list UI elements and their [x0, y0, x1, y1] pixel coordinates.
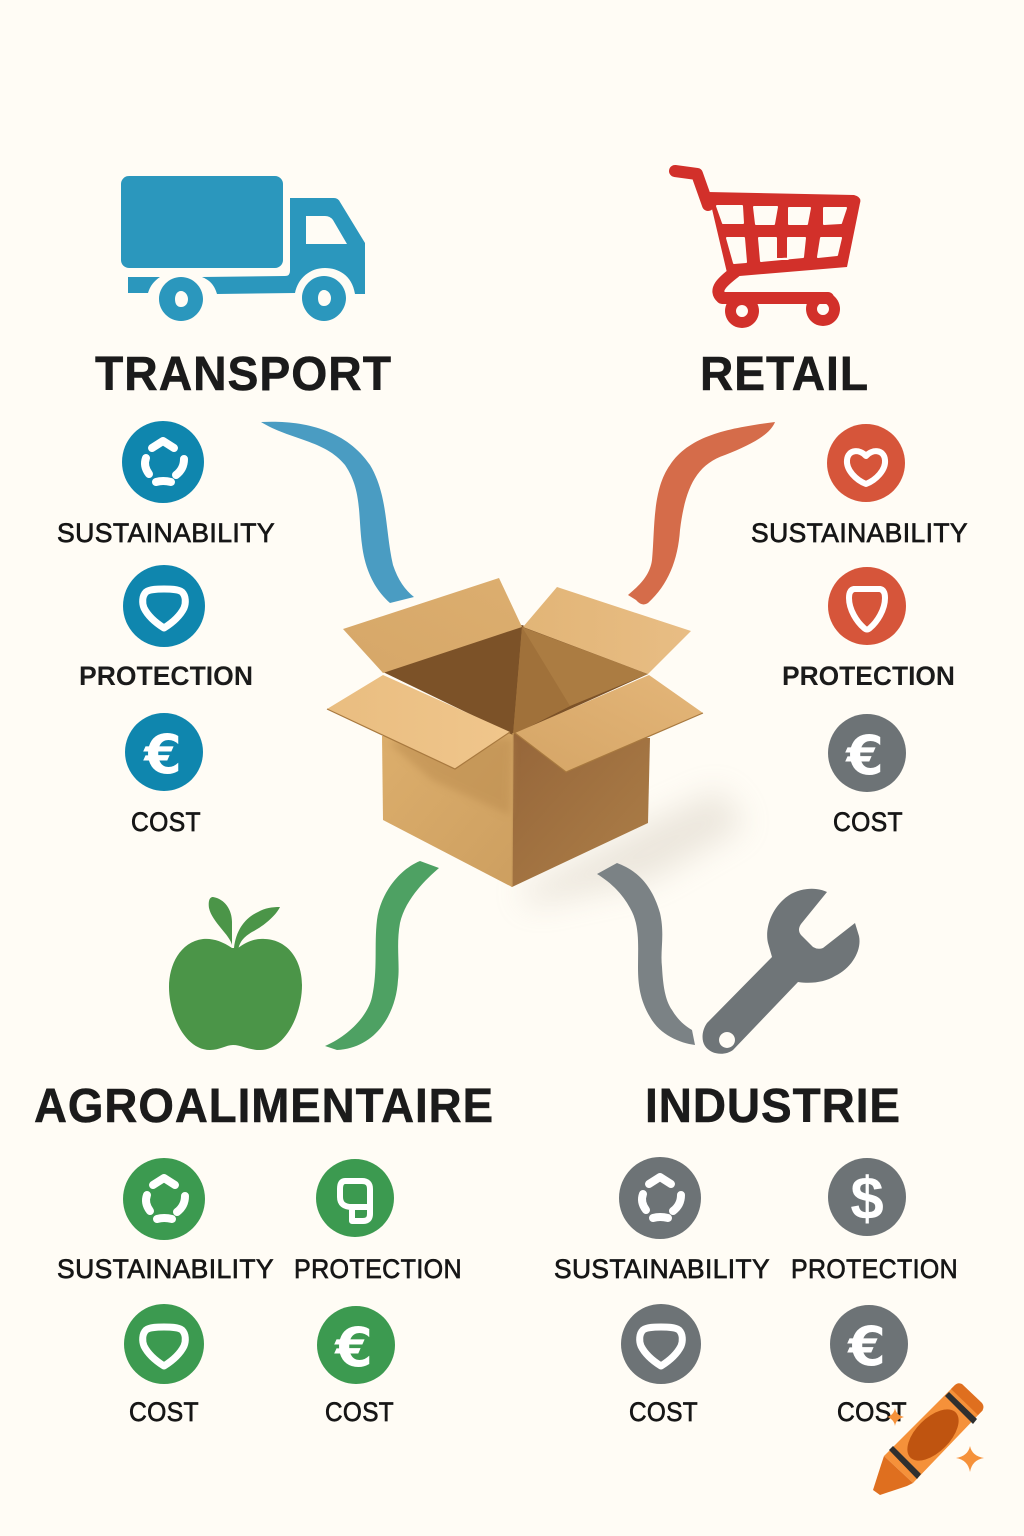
retail sustainability: SUSTAINABILITY — [751, 518, 968, 548]
retail protection: PROTECTION — [782, 661, 955, 691]
central cardboard box — [327, 578, 745, 905]
industrie sustainability: SUSTAINABILITY — [554, 1254, 770, 1284]
industrie cost 2: COST — [837, 1397, 907, 1427]
transport sustainability — [57, 421, 275, 548]
agro cost 2 — [317, 1306, 395, 1427]
agro sustainability: SUSTAINABILITY — [57, 1254, 274, 1284]
title: agroalimentaire: AGROALIMENTAIRE — [34, 1080, 494, 1133]
industrie sustainability — [554, 1157, 770, 1284]
arrow: industrie to box — [597, 863, 695, 1045]
industrie protection — [791, 1158, 958, 1284]
agro cost 2: COST — [325, 1397, 394, 1427]
transport cost — [125, 713, 203, 837]
retail protection — [782, 567, 955, 691]
icon: shopping cart — [675, 171, 860, 328]
icon: truck — [121, 176, 365, 321]
icon: crayon with sparkles — [873, 1383, 984, 1495]
transport sustainability: SUSTAINABILITY — [57, 518, 275, 548]
industrie cost 2 — [830, 1305, 908, 1427]
industrie cost 1 — [621, 1304, 701, 1427]
icon: apple — [169, 897, 302, 1050]
agro cost 1 — [124, 1304, 204, 1427]
title: industrie: INDUSTRIE — [645, 1080, 901, 1133]
retail cost — [828, 714, 906, 837]
retail cost: COST — [833, 807, 903, 837]
arrow: transport to box — [261, 422, 414, 603]
retail cost: € — [844, 724, 884, 787]
agro cost 2: € — [333, 1316, 373, 1379]
industrie cost 1: COST — [629, 1397, 698, 1427]
industrie cost 2: € — [846, 1315, 886, 1378]
transport protection — [79, 565, 253, 691]
icon: wrench — [703, 889, 860, 1054]
agro protection — [294, 1159, 462, 1284]
retail sustainability — [751, 424, 968, 548]
transport protection: PROTECTION — [79, 661, 253, 691]
transport cost: € — [142, 723, 182, 786]
industrie protection: $ — [850, 1165, 884, 1232]
agro sustainability — [57, 1158, 274, 1284]
arrow: agroalimentaire to box — [325, 861, 439, 1050]
transport cost: COST — [131, 807, 201, 837]
title: retail: RETAIL — [700, 348, 869, 401]
agro cost 1: COST — [129, 1397, 199, 1427]
industrie protection: PROTECTION — [791, 1254, 958, 1284]
arrow: retail to box — [628, 422, 775, 604]
title: transport: TRANSPORT — [95, 348, 392, 401]
agro protection: PROTECTION — [294, 1254, 462, 1284]
